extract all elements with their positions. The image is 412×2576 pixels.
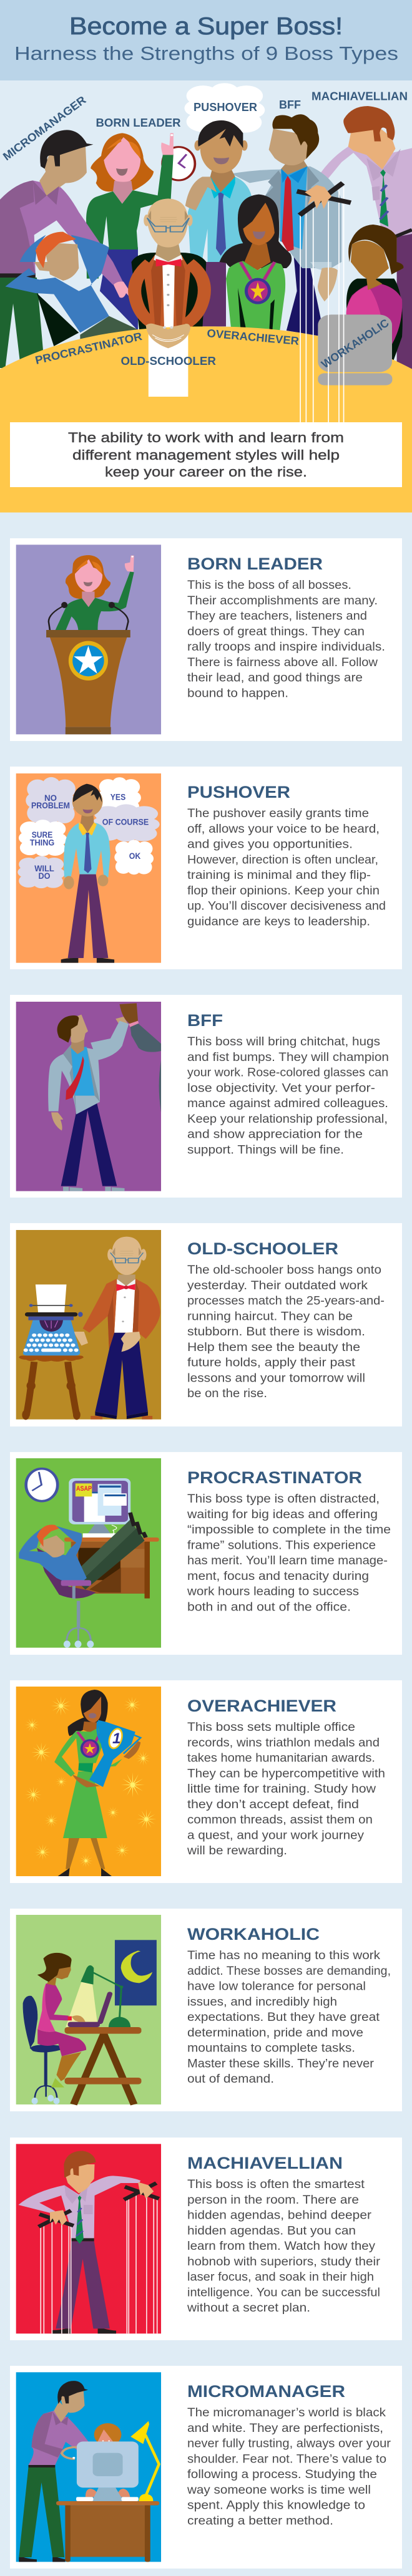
- text: micromanager: way someone works is time well: [187, 2484, 371, 2497]
- text: bff: [187, 1011, 389, 1156]
- text: machiavellian: laser focus, and soak in their high: [187, 2270, 374, 2284]
- panel: overachiever: [10, 1680, 402, 1883]
- hero artwork: [0, 83, 412, 513]
- text: overachiever: takes home humanitarian awards.: [187, 1751, 375, 1765]
- icon: thought cloud: [184, 83, 265, 133]
- text: old-schooler: stubborn. But there is wisdom.: [187, 1325, 365, 1339]
- text: old-schooler: running haircut. They can be: [187, 1310, 353, 1323]
- trophy number: 1: [112, 1730, 120, 1747]
- text: workaholic: issues, and incredibly high: [187, 1995, 337, 2008]
- panel: header: [0, 0, 412, 80]
- text: bff: BFF: [187, 1011, 223, 1030]
- text: old-schooler: lessons and your tomorrow will: [187, 1372, 365, 1385]
- text: procrastinator: ment, focus and tenacity during: [187, 1570, 369, 1583]
- text: micromanager: [187, 2382, 391, 2527]
- label: pushover: PUSHOVER: [194, 101, 257, 114]
- text: procrastinator: [187, 1468, 391, 1614]
- figure: overachiever: [219, 195, 292, 331]
- label: procrastinator: PROCRASTINATOR: [34, 330, 143, 367]
- text: procrastinator: has merit. You’ll learn time manage-: [187, 1554, 388, 1567]
- text: old-schooler: The old-schooler boss hangs onto: [187, 1264, 381, 1277]
- text: workaholic: addict. These bosses are demanding,: [187, 1965, 391, 1978]
- figure: born leader: [86, 133, 174, 331]
- figure: old-schooler: [131, 198, 206, 331]
- text: bff: and fist bumps. They will champion: [187, 1051, 389, 1064]
- text: old-schooler: Help them see the beauty the: [187, 1341, 360, 1354]
- panel: bff: [10, 995, 402, 1198]
- text: overachiever: [187, 1697, 385, 1857]
- text: overachiever: records, wins triathlon medals and: [187, 1736, 380, 1750]
- text: born leader: This is the boss of all bosses.: [187, 579, 351, 592]
- panel: hero group illustration: [0, 83, 412, 513]
- text: born leader: [187, 554, 385, 700]
- text: procrastinator: This boss type is often distracted,: [187, 1493, 380, 1506]
- panel: old-schooler: [10, 1223, 402, 1426]
- text: bff: support. Things will be fine.: [187, 1143, 344, 1156]
- illustration: pushover with clouds: [16, 773, 161, 963]
- subtitle: Harness the Strengths of 9 Boss Types: [14, 42, 398, 64]
- illustration: bff high five: [16, 1002, 161, 1191]
- label: born leader: BORN LEADER: [96, 117, 181, 129]
- text: micromanager: spent. Apply this knowledge to: [187, 2499, 365, 2512]
- text: workaholic: mountains to complete tasks.: [187, 2042, 355, 2055]
- text: micromanager: and white. They are perfectionists,: [187, 2422, 383, 2435]
- icon: wall clock: [162, 147, 195, 180]
- panel: born leader: [10, 538, 402, 741]
- text: workaholic: have low tolerance for personal: [187, 1980, 366, 1993]
- text: old-schooler: be on the rise.: [187, 1387, 267, 1400]
- text: machiavellian: hidden agendas, behind deeper: [187, 2209, 372, 2222]
- figure: machiavellian: [316, 106, 412, 372]
- marionette controls and strings: [297, 183, 351, 422]
- callout: career message: The ability to work with and learn from: [68, 430, 344, 445]
- arch: yellow ground: [0, 326, 412, 513]
- label: overachiever: OVERACHIEVER: [207, 327, 300, 347]
- text: procrastinator: “impossible to complete in the time: [187, 1523, 391, 1537]
- text: micromanager: shoulder. Fear not. There’s value to: [187, 2453, 386, 2466]
- text: bff: Keep your relationship professional,: [187, 1113, 388, 1126]
- text: overachiever: OVERACHIEVER: [187, 1697, 336, 1715]
- text: workaholic: Master these skills. They’re never: [187, 2057, 375, 2070]
- text: micromanager: never fully trusting, always over your: [187, 2438, 391, 2450]
- text: born leader: bound to happen.: [187, 687, 288, 700]
- figure: procrastinator: [5, 232, 138, 346]
- text: procrastinator: work hours leading to success: [187, 1586, 359, 1598]
- title: Become a Super Boss!: [69, 13, 343, 40]
- text: old-schooler: processes match the 25-years-and-: [187, 1295, 385, 1307]
- text: machiavellian: This boss is often the smartest: [187, 2178, 365, 2191]
- text: procrastinator: frame” solutions. This experience: [187, 1539, 376, 1552]
- illustration: procrastinator at desk: [16, 1458, 161, 1648]
- text: born leader: They are teachers, listeners and: [187, 610, 367, 622]
- text: bff: mance against admired colleagues.: [187, 1097, 388, 1110]
- text: micromanager: The micromanager’s world is black: [187, 2406, 386, 2419]
- cloud word: will do: DO: [39, 871, 51, 881]
- text: procrastinator: both in and out of the office.: [187, 1600, 351, 1614]
- sticky note: asap: ASAP: [76, 1485, 92, 1493]
- text: old-schooler: OLD-SCHOOLER: [187, 1239, 338, 1258]
- text: micromanager: MICROMANAGER: [187, 2382, 345, 2401]
- callout: career message: different management styles will help: [72, 447, 340, 463]
- figure: workaholic: [346, 225, 403, 366]
- illustration: old-schooler with typewriter: [16, 1230, 171, 1420]
- text: pushover: However, direction is often unclear,: [187, 853, 378, 866]
- text: pushover: flop their opinions. Keep your chin: [187, 884, 380, 898]
- text: overachiever: They can be hypercompetitive with: [187, 1767, 385, 1780]
- text: workaholic: [187, 1925, 391, 2086]
- text: workaholic: Time has no meaning to this work: [187, 1949, 381, 1962]
- cloud word: ok: OK: [129, 851, 140, 861]
- cloud word: sure thing: SURE: [32, 830, 52, 840]
- text: born leader: doers of great things. They can: [187, 625, 365, 638]
- illustration: micromanager over shoulder: [16, 2372, 161, 2562]
- text: procrastinator: waiting for big ideas and offering: [187, 1508, 378, 1521]
- old-schooler shirt tail and clasped hands: [146, 324, 190, 397]
- cloud word: no problem: [31, 793, 70, 810]
- text: micromanager: creating a better method.: [187, 2514, 333, 2527]
- text: pushover: off, allows your voice to be heard,: [187, 823, 380, 836]
- text: machiavellian: hidden agendas. But you can: [187, 2224, 356, 2237]
- text: pushover: and gives you opportunities.: [187, 838, 353, 851]
- cloud word: yes: YES: [110, 792, 125, 802]
- text: overachiever: they don’t accept defeat, find: [187, 1798, 359, 1811]
- text: overachiever: will be rewarding.: [187, 1844, 287, 1857]
- text: born leader: BORN LEADER: [187, 554, 323, 573]
- text: bff: and show appreciation for the: [187, 1128, 363, 1141]
- cloud word: of course: OF COURSE: [102, 817, 149, 827]
- illustration: born leader at podium: [16, 545, 161, 734]
- text: old-schooler: future holds, apply their past: [187, 1356, 356, 1370]
- illustration: machiavellian puppeteer: [16, 2144, 161, 2333]
- text: born leader: There is fairness above all. Follow: [187, 656, 378, 669]
- laptop: [318, 314, 392, 385]
- cloud word: no problem: NO: [44, 793, 57, 803]
- callout: career message: [10, 422, 402, 487]
- label: micromanager: MICROMANAGER: [1, 94, 88, 163]
- text: workaholic: out of demand.: [187, 2073, 274, 2086]
- panel: pushover: [10, 767, 402, 969]
- text: machiavellian: MACHIAVELLIAN: [187, 2154, 343, 2172]
- label: workaholic: WORKAHOLIC: [319, 316, 391, 370]
- text: pushover: training is minimal and they flip-: [187, 869, 371, 882]
- panel: machiavellian: [10, 2138, 402, 2340]
- text: overachiever: a quest, and your work journey: [187, 1829, 365, 1842]
- text: micromanager: following a process. Studying the: [187, 2468, 377, 2481]
- text: born leader: their lead, and good things are: [187, 671, 363, 685]
- text: pushover: guidance are keys to leadership.: [187, 915, 370, 928]
- panel: procrastinator: [10, 1452, 402, 1655]
- text: born leader: Their accomplishments are many.: [187, 594, 378, 608]
- text: overachiever: common threads, assist them on: [187, 1814, 373, 1826]
- text: machiavellian: intelligence. You can be successful: [187, 2286, 380, 2299]
- text: old-schooler: yesterday. Their outdated work: [187, 1279, 368, 1292]
- label: machiavellian: MACHIAVELLIAN: [311, 90, 408, 102]
- cloud word: no problem: PROBLEM: [31, 800, 70, 810]
- figure: pushover: [185, 120, 252, 326]
- text: machiavellian: [187, 2154, 381, 2315]
- panel: workaholic: [10, 1909, 402, 2111]
- text: procrastinator: PROCRASTINATOR: [187, 1468, 362, 1487]
- illustration: overachiever with trophy: [16, 1687, 161, 1876]
- panel: micromanager: [10, 2366, 402, 2569]
- figure: micromanager: [0, 130, 135, 368]
- text: bff: your work. Rose-colored glasses can: [187, 1067, 388, 1079]
- text: old-schooler: [187, 1239, 385, 1400]
- text: overachiever: little time for training. Study how: [187, 1783, 376, 1796]
- text: workaholic: WORKAHOLIC: [187, 1925, 320, 1944]
- label: bff: BFF: [279, 99, 301, 111]
- cloud word: will do: [34, 863, 54, 881]
- text: overachiever: This boss sets multiple office: [187, 1721, 355, 1734]
- text: machiavellian: without a secret plan.: [187, 2302, 310, 2315]
- figure: bff: [231, 114, 341, 337]
- text: bff: This boss will bring chitchat, hugs: [187, 1035, 380, 1048]
- text: bff: lose objectivity. Vet your perfor-: [187, 1082, 375, 1095]
- text: machiavellian: hobnob with superiors, study their: [187, 2255, 381, 2269]
- callout: career message: keep your career on the rise.: [105, 464, 307, 480]
- text: pushover: PUSHOVER: [187, 783, 290, 801]
- text: machiavellian: person in the room. There are: [187, 2194, 359, 2207]
- text: machiavellian: learn from them. Watch how they: [187, 2240, 376, 2253]
- cloud word: sure thing: [30, 830, 54, 847]
- text: workaholic: expectations. But they have great: [187, 2011, 380, 2024]
- cloud word: sure thing: THING: [30, 837, 54, 847]
- text: pushover: up. You’ll discover decisiveness and: [187, 899, 386, 913]
- cloud word: will do: WILL: [34, 863, 54, 873]
- text: born leader: rally troops and inspire individuals.: [187, 641, 385, 654]
- text: workaholic: determination, pride and move: [187, 2026, 363, 2040]
- illustration: workaholic at night desk: [16, 1915, 161, 2104]
- text: pushover: The pushover easily grants time: [187, 807, 369, 820]
- label: old-schooler: OLD-SCHOOLER: [121, 355, 216, 367]
- text: pushover: [187, 783, 386, 928]
